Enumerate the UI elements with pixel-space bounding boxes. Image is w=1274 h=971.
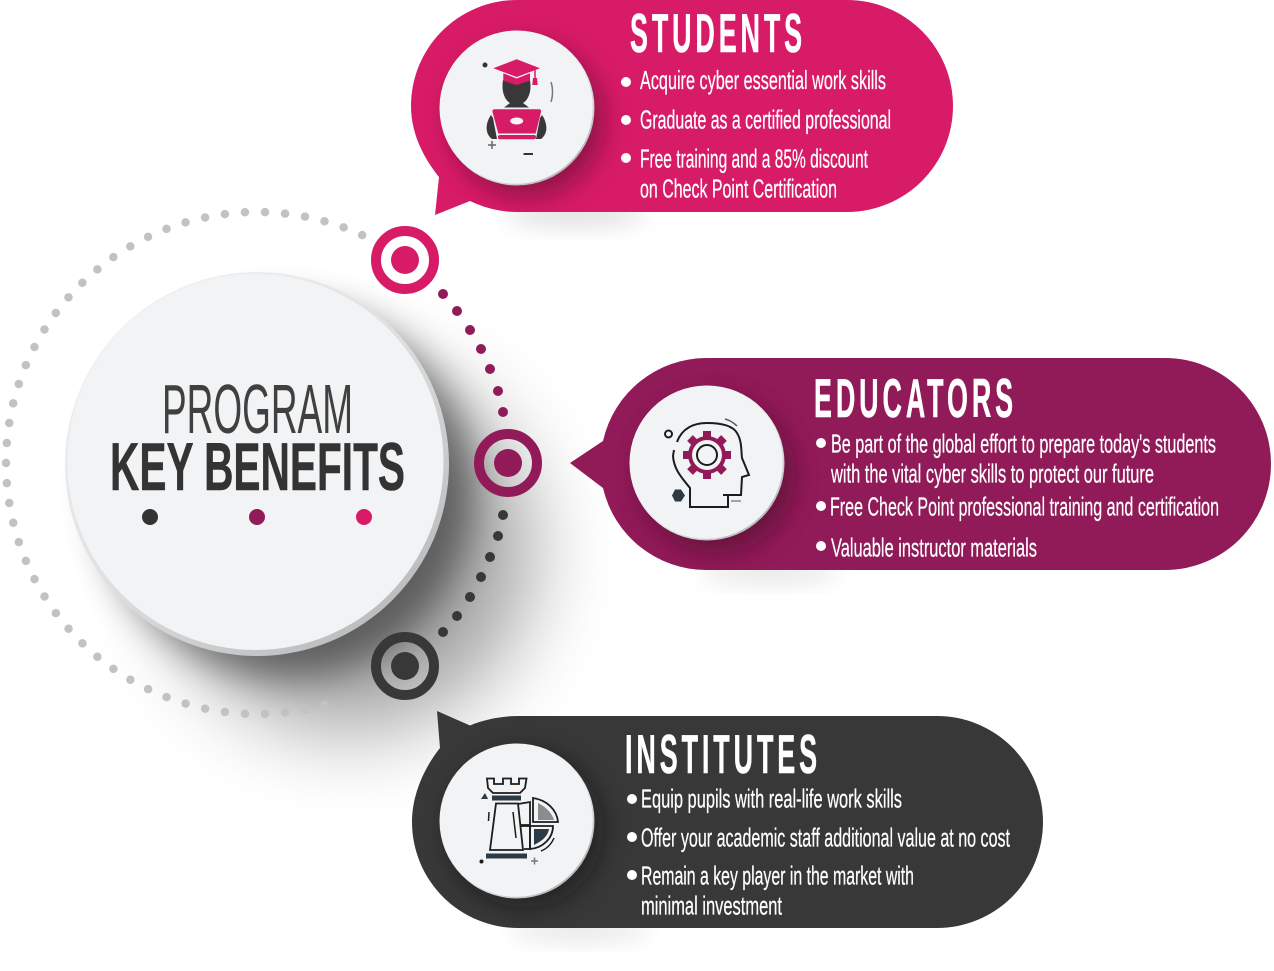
dotted ring: grey dots [6,212,362,714]
icon disc: educators [630,386,784,540]
list: students benefits [621,65,891,204]
heading: program key benefits: KEY BENEFITS [110,429,405,505]
list: educators benefits [816,428,1219,562]
dotted connector: purple dots [438,289,508,417]
icon: chess rook with pie chart [480,778,558,864]
heading: program key benefits [110,370,405,505]
panel: institutes: INSTITUTES [625,723,821,785]
panel: educators: EDUCATORS [814,367,1017,429]
list: institutes benefits: Remain a key player in the market with [641,860,914,890]
panel: students [411,0,953,215]
bubble shadows [505,201,840,941]
list: students benefits: on Check Point Certification [640,174,837,204]
list: institutes benefits [627,784,1010,920]
list: students benefits: Acquire cyber essential work skills [640,65,886,95]
icon disc: institutes [440,744,594,898]
node: purple target [479,434,537,492]
panel: educators [570,358,1271,570]
list: students benefits: Graduate as a certified professional [640,104,891,134]
list: institutes benefits: minimal investment [641,890,782,920]
node: pink target [376,231,434,289]
list: students benefits: Free training and a 85% discount [640,144,868,174]
panel: institutes [412,711,1043,928]
heading: program key benefits: PROGRAM [162,370,353,448]
node: dark target [376,637,434,695]
shadow: central circle [97,302,532,732]
list: educators benefits: Valuable instructor materials [831,532,1037,562]
central circle [65,272,449,656]
panel: students: STUDENTS [630,2,806,64]
icon: graduate with laptop [482,59,552,154]
list: institutes benefits: Equip pupils with real-life work skills [641,784,902,814]
icon disc: students [440,30,594,186]
list: institutes benefits: Offer your academic staff additional value at no cost [641,822,1010,852]
icon: head with gear [665,419,749,507]
three legend dots [142,509,372,525]
dotted connector: dark dots [438,510,508,637]
